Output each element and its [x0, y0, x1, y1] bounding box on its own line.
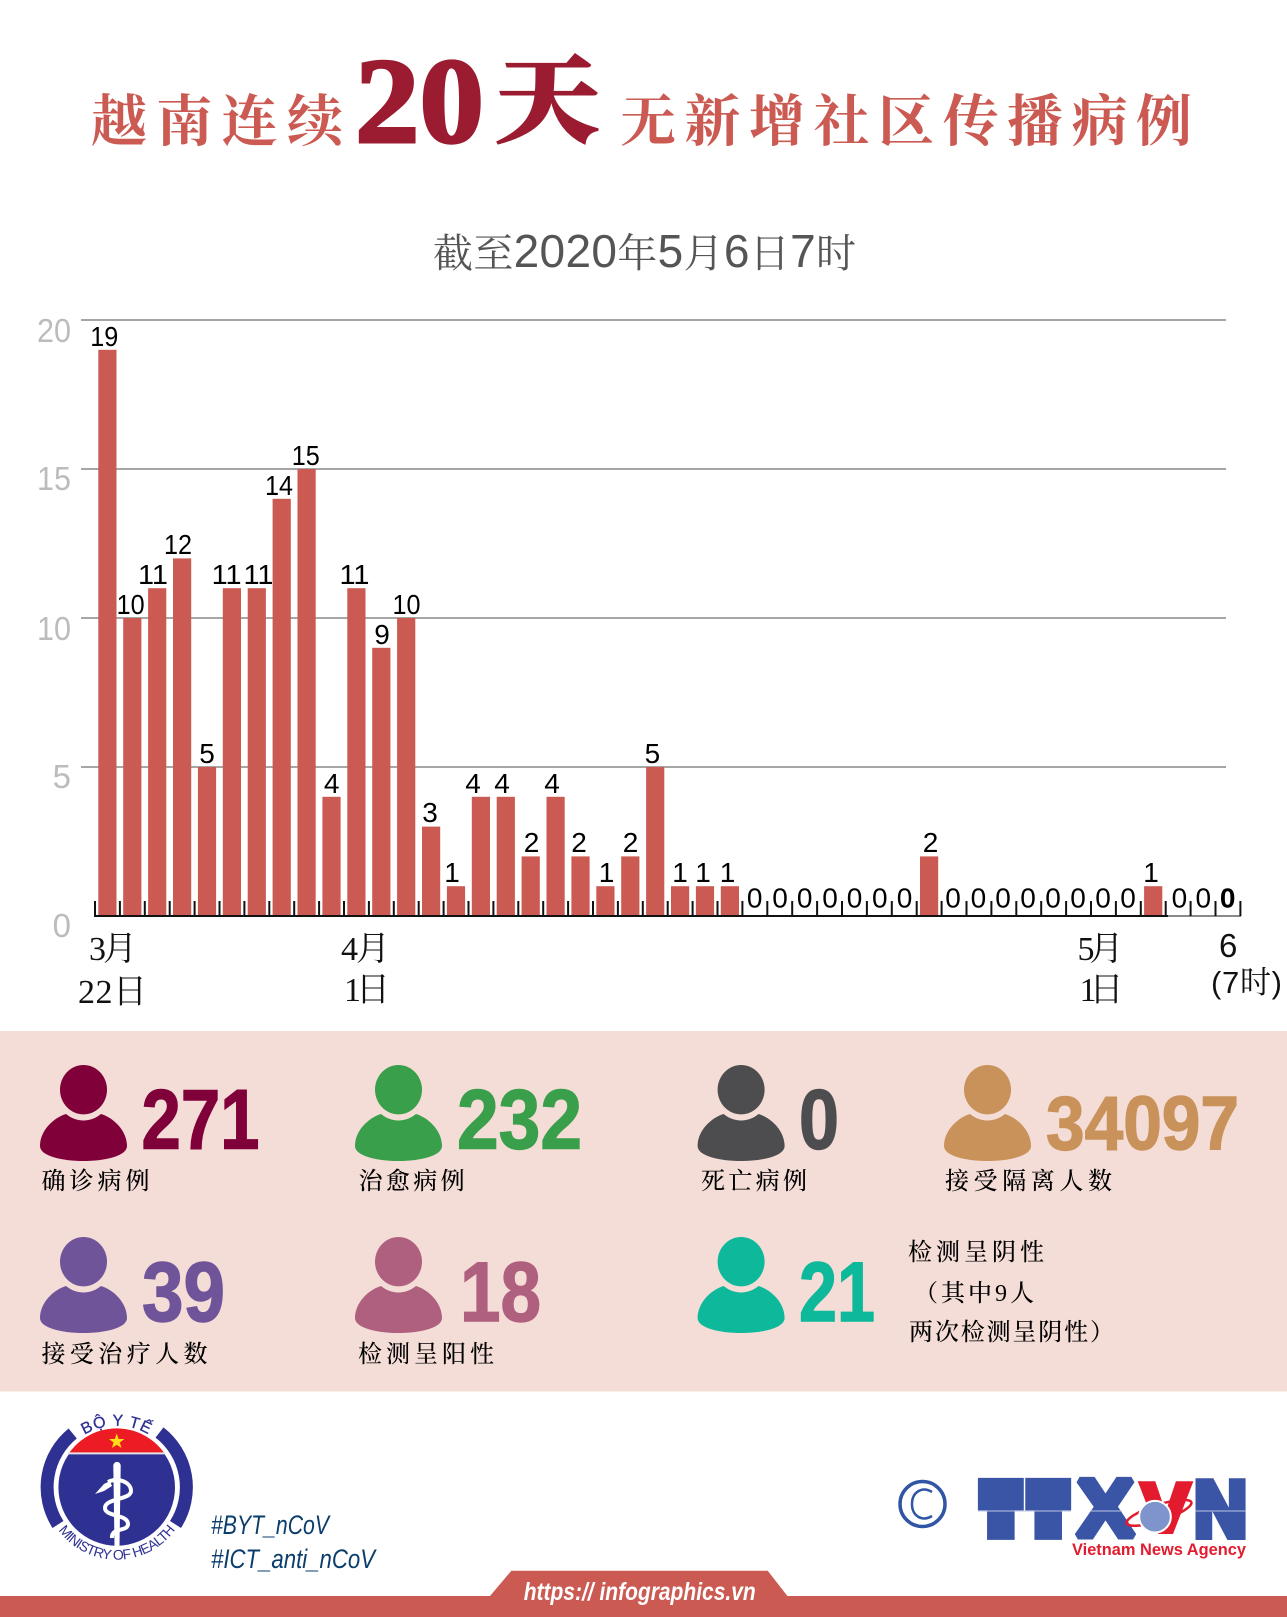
bar value labels: 0 [772, 882, 788, 914]
stat: confirmed cases: 确诊病例 [42, 1168, 150, 1195]
logo: Ministry of Health: MINISTRY OF HEALTH [59, 1524, 175, 1560]
x axis date labels [78, 927, 1282, 1011]
bar value labels: 0 [995, 882, 1011, 914]
logo: Ministry of Health: BỘ Y TẾ [80, 1414, 154, 1434]
bar value labels: 10 [392, 589, 420, 620]
stat: recovered cases: 232 [457, 1072, 582, 1166]
stat: tested negative: （其中9人 [914, 1280, 1034, 1307]
bar value labels [90, 321, 1235, 914]
bar value labels: 0 [797, 882, 812, 914]
bar value labels: 0 [1045, 882, 1061, 914]
footer bar with website tab: https:// infographics.vn [524, 1578, 756, 1606]
x axis date labels: 22日 [78, 974, 147, 1011]
bar value labels: 9 [374, 619, 390, 650]
stat: tested positive [355, 1237, 541, 1368]
stat: tested negative: 21 [799, 1245, 875, 1339]
bar value labels: 1 [720, 857, 735, 888]
bar value labels: 1 [444, 857, 460, 888]
bar chart: daily new cases [37, 312, 1282, 1011]
stat: quarantined: 接受隔离人数 [945, 1168, 1112, 1195]
bar value labels: 0 [971, 882, 986, 914]
bar value labels: 15 [292, 440, 320, 471]
title: 无新增社区传播病例 [620, 92, 1192, 154]
bar value labels: 0 [1172, 882, 1187, 914]
chart gridlines [81, 320, 1226, 767]
bar value labels: 3 [422, 797, 438, 828]
hashtags: #ICT_anti_nCoV [211, 1544, 377, 1574]
stat: deaths: 0 [799, 1072, 839, 1166]
stat: confirmed cases [40, 1065, 260, 1195]
stat: tested positive: 检测呈阳性 [358, 1341, 494, 1368]
hashtags: #BYT_nCoV [211, 1510, 331, 1540]
stat: confirmed cases: 271 [142, 1072, 260, 1166]
bar value labels: 1 [695, 857, 711, 888]
y axis labels: 10 [37, 610, 71, 647]
hashtags [211, 1510, 377, 1574]
title: 天 [495, 49, 600, 155]
bar value labels: 4 [494, 768, 510, 799]
bar value labels: 2 [923, 827, 938, 858]
y axis labels: 5 [53, 758, 71, 795]
bar value labels: 0 [1095, 882, 1111, 914]
bar value labels: 14 [265, 470, 293, 501]
logo: TTXVN Vietnam News Agency [978, 1463, 1247, 1559]
bars [98, 350, 1162, 916]
logo: TTXVN Vietnam News Agency: T [1036, 1480, 1061, 1538]
y axis labels: 0 [53, 907, 71, 944]
bar value labels: 1 [1143, 857, 1159, 888]
bar value labels: 1 [599, 857, 614, 888]
logo: TTXVN Vietnam News Agency: Vietnam News Agency [1072, 1540, 1247, 1559]
bar value labels: 0 [822, 882, 838, 914]
bar value labels: 4 [544, 768, 560, 799]
bar value labels: 12 [164, 529, 192, 560]
bar value labels: 5 [645, 738, 660, 769]
stat: deaths [698, 1065, 839, 1195]
bar value labels: 0 [847, 882, 862, 914]
x axis date labels: (7时) [1211, 965, 1282, 1000]
y axis labels: 15 [37, 460, 71, 497]
bar value labels: 0 [945, 882, 961, 914]
bar value labels: 0 [1220, 882, 1235, 914]
bar value labels: 0 [897, 882, 912, 914]
stat: tested negative [698, 1237, 1114, 1346]
stat: recovered cases [355, 1065, 582, 1195]
bar value labels: 19 [90, 321, 118, 352]
x axis date labels: 1日 [1080, 972, 1124, 1009]
bar value labels: 0 [872, 882, 888, 914]
bar value labels: 1 [672, 857, 688, 888]
x axis and ticks [94, 901, 1241, 916]
bar value labels: 2 [524, 827, 539, 858]
x axis date labels: 1日 [344, 972, 390, 1009]
logo: Ministry of Health [40, 1414, 193, 1560]
logo: TTXVN Vietnam News Agency: N [1194, 1466, 1247, 1553]
x axis date labels: 3月 [89, 931, 137, 968]
stat: quarantined: 34097 [1046, 1082, 1239, 1166]
bar value labels: 11 [244, 559, 274, 590]
icon: copyright symbol [900, 1482, 945, 1526]
title: 20 [355, 34, 484, 169]
stat: quarantined [944, 1065, 1239, 1195]
bar value labels: 4 [465, 768, 481, 799]
y axis labels: 20 [37, 312, 71, 349]
y axis labels [37, 312, 71, 944]
logo: TTXVN Vietnam News Agency: V [1142, 1470, 1190, 1546]
x axis date labels: 6 [1219, 927, 1237, 964]
bar value labels: 2 [623, 827, 638, 858]
logo: TTXVN Vietnam News Agency: T [988, 1480, 1013, 1538]
stat: under treatment: 接受治疗人数 [42, 1341, 208, 1368]
bar value labels: 0 [747, 882, 762, 914]
logo: TTXVN Vietnam News Agency: X [1077, 1463, 1134, 1554]
stat: deaths: 死亡病例 [701, 1168, 807, 1195]
bar value labels: 5 [199, 738, 215, 769]
stat: tested negative: 检测呈阴性 [908, 1239, 1044, 1266]
footer bar with website tab [0, 1571, 1287, 1617]
bar value labels: 2 [571, 827, 587, 858]
title: 越南连续 [91, 92, 346, 154]
x axis date labels: 4月 [341, 931, 390, 968]
bar value labels: 11 [212, 559, 242, 590]
stat: tested positive: 18 [460, 1245, 541, 1339]
bar value labels: 11 [340, 559, 370, 590]
title [91, 34, 1192, 169]
panel: statistics [0, 1031, 1287, 1392]
bar value labels: 10 [117, 589, 145, 620]
stat: tested negative: 两次检测呈阴性） [909, 1319, 1114, 1346]
stat: under treatment: 39 [142, 1245, 225, 1339]
bar value labels: 11 [138, 559, 168, 590]
subtitle: data date: 截至2020年5月6日7时 [433, 225, 856, 277]
bar value labels: 0 [1070, 882, 1086, 914]
bar value labels: 0 [1120, 882, 1136, 914]
bar value labels: 0 [1196, 882, 1211, 914]
x axis date labels: 5月 [1078, 931, 1124, 968]
stat: recovered cases: 治愈病例 [359, 1168, 465, 1195]
bar value labels: 0 [1020, 882, 1036, 914]
stat: under treatment [40, 1237, 225, 1368]
bar value labels: 4 [324, 768, 339, 799]
